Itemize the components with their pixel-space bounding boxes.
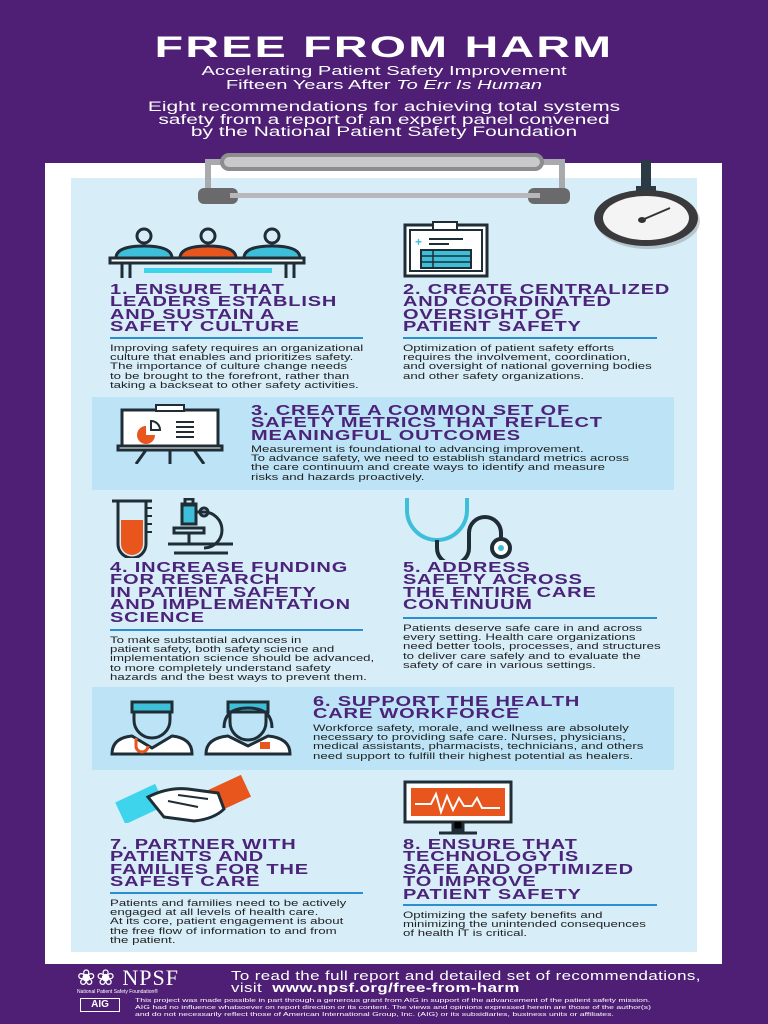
icon: clipboard chart: + [415, 235, 422, 249]
text 4: To make substantial advances in [110, 635, 301, 646]
heading 4 [110, 560, 351, 626]
text 3 [251, 444, 629, 483]
text 7 [110, 898, 346, 946]
heading 4: FOR RESEARCH [110, 572, 280, 588]
text 7: the free flow of information to and from [110, 926, 337, 937]
text 5: to deliver care safely and to evaluate the [403, 651, 641, 662]
text 2: requires the involvement, coordination, [403, 352, 630, 363]
heading 6 [313, 694, 580, 722]
heading 1: LEADERS ESTABLISH [110, 294, 337, 310]
subtitle: Fifteen Years After To Err Is Human [226, 77, 542, 92]
icon: test tube and microscope [112, 498, 233, 558]
text 5: safety of care in various settings. [403, 660, 596, 671]
heading 4: AND IMPLEMENTATION [110, 597, 351, 613]
icon: health workers [110, 700, 292, 756]
footer logo NPSF: National Patient Safety Foundation® [77, 989, 158, 995]
icon: handshake [115, 775, 251, 823]
text 1: The importance of culture change needs [110, 361, 347, 372]
text 2 [403, 343, 652, 382]
heading 5: THE ENTIRE CARE [403, 585, 597, 601]
heading 8: TO IMPROVE [403, 874, 537, 890]
heading 7: FAMILIES FOR THE [110, 862, 309, 878]
footer logo NPSF: ❀❀ NPSF [77, 965, 179, 990]
text 3: To advance safety, we need to establish standard metrics across [251, 453, 629, 464]
icon: leaders at table [108, 228, 306, 278]
heading 8: 8. ENSURE THAT [403, 837, 578, 853]
heading 8 [403, 837, 634, 903]
band 6 [92, 687, 674, 770]
icon: presentation board [116, 404, 224, 464]
text 4: hazards and the best ways to prevent them. [110, 672, 367, 683]
intro text: by the National Patient Safety Foundation [191, 124, 577, 139]
text 6: need support to fulfill their highest potential as healers. [313, 751, 633, 762]
text 3: Measurement is foundational to advancing improvement. [251, 444, 584, 455]
heading 4: SCIENCE [110, 610, 205, 626]
heading 7: SAFEST CARE [110, 874, 260, 890]
footer call to action: To read the full report and detailed set of recommendations, [231, 969, 701, 983]
heading 3: 3. CREATE A COMMON SET OF [251, 403, 570, 419]
icon: clipboard chart [404, 221, 488, 278]
text 5: need better tools, processes, and structures [403, 641, 661, 652]
text 1: to be brought to the forefront, rather than [110, 371, 349, 382]
heading 8: TECHNOLOGY IS [403, 849, 579, 865]
text 4: to more completely understand safety [110, 663, 331, 674]
disclaimer: and do not necessarily reflect those of American International Group, Inc. (AIG) or its subsidiaries, business units or affiliates. [135, 1012, 614, 1018]
text 8 [403, 910, 646, 939]
text 3: risks and hazards proactively. [251, 472, 424, 483]
disclaimer: AIG had no influence whatsoever on report direction or its content. The views and opinions expressed herein are those of the author(s) [135, 1005, 651, 1011]
heading 8: SAFE AND OPTIMIZED [403, 862, 634, 878]
heading 1 [110, 282, 337, 335]
text 4 [110, 635, 374, 683]
footer call to action [231, 969, 701, 994]
icon: monitor [404, 780, 512, 834]
subtitle: Accelerating Patient Safety Improvement [201, 63, 567, 78]
heading 8: PATIENT SAFETY [403, 887, 582, 903]
text 6 [313, 723, 643, 762]
text 4: implementation science should be advanced, [110, 653, 374, 664]
text 6: Workforce safety, morale, and wellness are absolutely [313, 723, 629, 734]
title: FREE FROM HARM [155, 31, 613, 64]
intro text: safety from a report of an expert panel convened [158, 112, 610, 126]
icon: stethoscope [405, 498, 512, 560]
text 7: the patient. [110, 935, 176, 946]
AIG logo: AIG [91, 999, 109, 1010]
text 8: Optimizing the safety benefits and [403, 910, 602, 921]
heading 2: PATIENT SAFETY [403, 319, 582, 335]
intro text [148, 99, 620, 139]
heading 1: SAFETY CULTURE [110, 319, 300, 335]
heading 5: SAFETY ACROSS [403, 572, 583, 588]
text 4: patient safety, both safety science and [110, 644, 334, 655]
text 7: engaged at all levels of health care. [110, 907, 318, 918]
text 5: every setting. Health care organizations [403, 632, 636, 643]
text 7: At its core, patient engagement is about [110, 916, 343, 927]
AIG logo [80, 998, 120, 1012]
subtitle [201, 63, 567, 92]
text 1: Improving safety requires an organizational [110, 343, 363, 354]
heading 5: CONTINUUM [403, 597, 533, 613]
heading 3: SAFETY METRICS THAT REFLECT [251, 415, 603, 431]
heading 5 [403, 560, 597, 613]
band 3 [92, 397, 674, 490]
heading 4: 4. INCREASE FUNDING [110, 560, 348, 576]
text 6: necessary to providing safe care. Nurses, physicians, [313, 732, 626, 743]
heading 4: IN PATIENT SAFETY [110, 585, 317, 601]
disclaimer [135, 998, 651, 1018]
text 2: Optimization of patient safety efforts [403, 343, 614, 354]
text 1 [110, 343, 363, 391]
text 3: the care continuum and create ways to identify and measure [251, 462, 605, 473]
text 2: and oversight of national governing bodies [403, 361, 652, 372]
heading 5: 5. ADDRESS [403, 560, 531, 576]
text 2: and other safety organizations. [403, 371, 584, 382]
heading 6: CARE WORKFORCE [313, 706, 520, 722]
heading 2: 2. CREATE CENTRALIZED [403, 282, 670, 298]
text 5 [403, 623, 661, 671]
icon: stopwatch [594, 160, 700, 249]
heading 2: AND COORDINATED [403, 294, 612, 310]
heading 1: AND SUSTAIN A [110, 307, 275, 323]
text 5: Patients deserve safe care in and across [403, 623, 642, 634]
icon: clipboard clip [198, 153, 570, 204]
heading 7 [110, 837, 309, 890]
text 6: medical assistants, pharmacists, technicians, and others [313, 741, 643, 752]
text 7: Patients and families need to be actively [110, 898, 346, 909]
heading 3 [251, 403, 603, 444]
heading 7: PATIENTS AND [110, 849, 264, 865]
intro text: Eight recommendations for achieving total systems [148, 99, 620, 114]
heading 2 [403, 282, 670, 335]
text 1: taking a backseat to other safety activities. [110, 380, 359, 391]
disclaimer: This project was made possible in part through a generous grant from AIG in support of the advancement of the patient safety mission. [135, 998, 650, 1004]
heading 2: OVERSIGHT OF [403, 307, 564, 323]
inner panel [71, 178, 697, 952]
clipboard board [45, 163, 722, 964]
text 8: minimizing the unintended consequences [403, 919, 646, 930]
text 8: of health IT is critical. [403, 928, 527, 939]
heading 1: 1. ENSURE THAT [110, 282, 285, 298]
heading 3: MEANINGFUL OUTCOMES [251, 428, 521, 444]
footer call to action: visit www.npsf.org/free-from-harm [231, 980, 520, 994]
text 1: culture that enables and prioritizes safety. [110, 352, 353, 363]
heading 6: 6. SUPPORT THE HEALTH [313, 694, 580, 710]
heading 7: 7. PARTNER WITH [110, 837, 297, 853]
